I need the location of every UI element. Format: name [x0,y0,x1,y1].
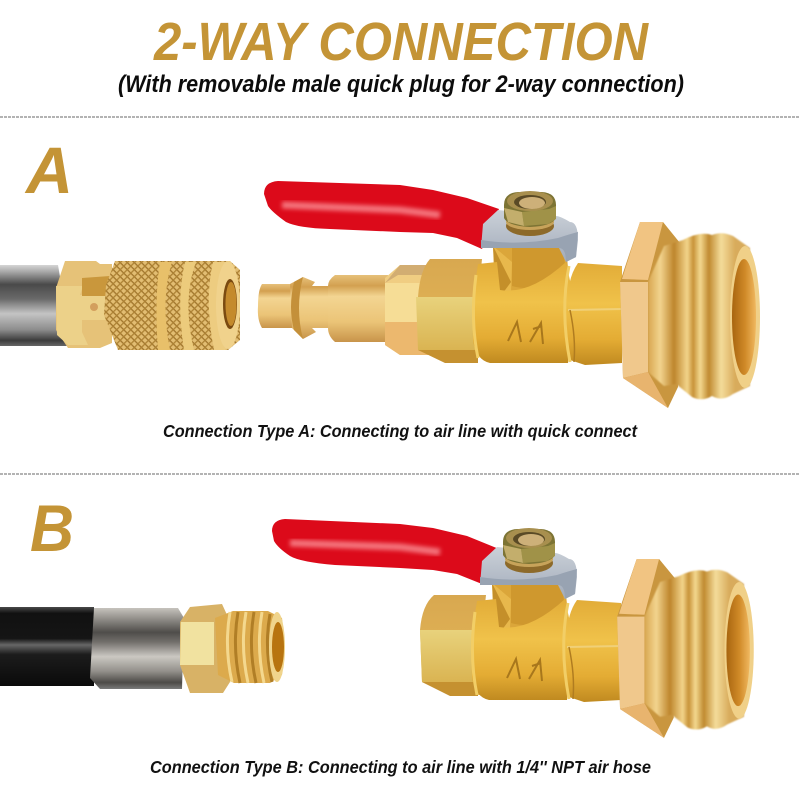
valve body, silver bracket and bolt [473,191,622,365]
connection A: air hose with quick-connect coupler [0,261,240,350]
knurled coupler sleeve [104,261,240,350]
connection B: ball valve with female port [272,519,754,738]
female hex port [420,595,486,696]
connection A: ball valve with male quick plug [258,181,760,408]
metal ferrule [90,608,184,689]
hex nut [416,259,482,363]
threaded hex end [617,559,754,738]
caption A: Connection Type A: Connecting to air line with quick connect [163,421,638,441]
section letter A: A [24,133,73,207]
caption B: Connection Type B: Connecting to air line with 1/4'' NPT air hose [150,757,651,777]
metal hose ferrule [0,265,68,346]
title: 2-WAY CONNECTION [153,12,649,72]
threaded hex end [620,222,760,408]
brass hex fitting [56,261,112,348]
valve body, silver bracket and bolt [472,528,621,702]
brass hex fitting [180,604,230,693]
section letter B: B [30,491,74,565]
red lever handle [272,519,499,584]
male thread [215,611,285,683]
male quick plug [258,275,388,342]
connection B: NPT air hose [0,604,285,693]
hex adapter [385,265,428,355]
black hose [0,607,94,686]
subtitle: (With removable male quick plug for 2-way connection) [118,71,684,98]
red lever handle [264,181,499,249]
